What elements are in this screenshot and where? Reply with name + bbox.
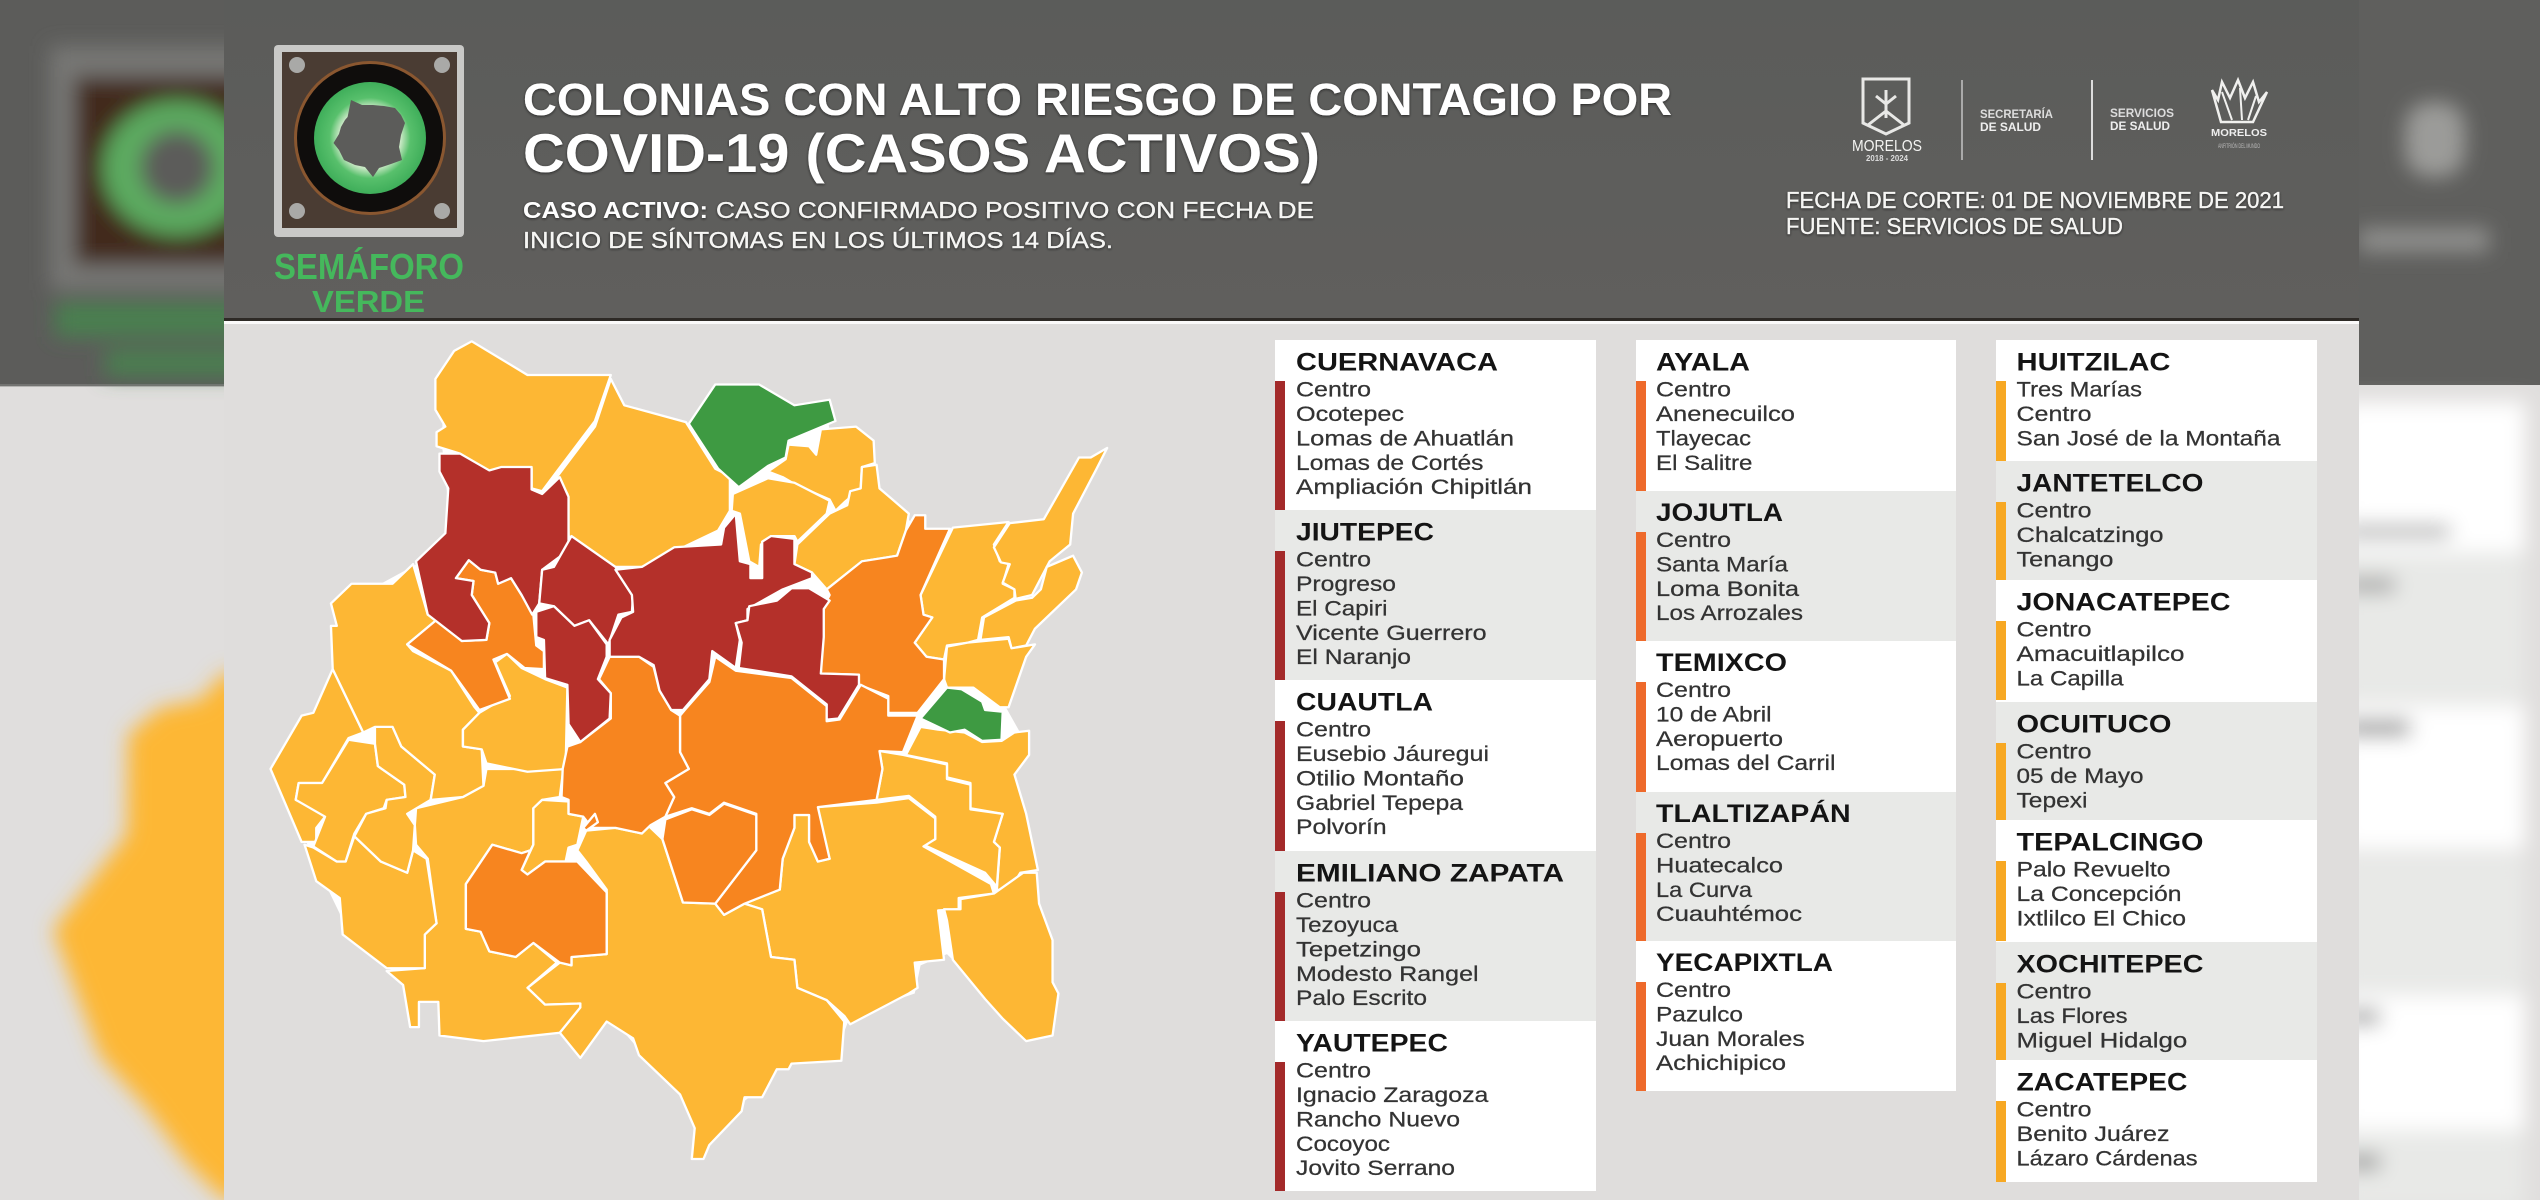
card: Cuautla bbox=[1275, 680, 1596, 852]
card: Zacatepec: Benito Juárez bbox=[2016, 1123, 2170, 1146]
icon: Morelos coat of arms bbox=[1852, 79, 1922, 163]
card: Yautepec: Ignacio Zaragoza bbox=[1296, 1084, 1489, 1107]
Servicios de Salud: SERVICIOS bbox=[2110, 106, 2174, 120]
card: Jojutla: Los Arrozales bbox=[1656, 602, 1803, 625]
card: Tepalcingo: TEPALCINGO bbox=[2016, 828, 2204, 856]
card: Temixco: TEMIXCO bbox=[1656, 649, 1787, 677]
definition text: INICIO DE SÍNTOMAS EN LOS ÚLTIMOS 14 DÍAS. bbox=[523, 227, 1113, 253]
card: Jonacatepec: Amacuitlapilco bbox=[2016, 643, 2184, 666]
card: Temixco: Centro bbox=[1656, 679, 1731, 702]
card: Ayala: Tlayecac bbox=[1656, 427, 1751, 450]
card: Tlaltizapán: La Curva bbox=[1656, 879, 1752, 902]
card: Jantetelco bbox=[1996, 461, 2317, 580]
card: Yecapixtla: Pazulco bbox=[1656, 1003, 1743, 1026]
card: Tlaltizapán: Cuauhtémoc bbox=[1656, 903, 1802, 926]
card: Temixco: Lomas del Carril bbox=[1656, 752, 1836, 775]
card: Cuautla: Centro bbox=[1296, 719, 1371, 742]
cut-off date and source bbox=[1786, 187, 2284, 239]
card: Emiliano Zapata: Tezoyuca bbox=[1296, 914, 1398, 937]
card: Jiutepec: El Naranjo bbox=[1296, 646, 1411, 669]
card: Huitzilac: HUITZILAC bbox=[2016, 348, 2170, 376]
icon: Morelos coat of arms: 2018 - 2024 bbox=[1866, 154, 1909, 163]
card: Jonacatepec bbox=[1996, 580, 2317, 702]
card: Jiutepec: Vicente Guerrero bbox=[1296, 622, 1487, 645]
Secretaría de Salud: SECRETARÍA bbox=[1980, 106, 2053, 121]
card: Huitzilac: Centro bbox=[2016, 403, 2092, 426]
card: Tepalcingo: La Concepción bbox=[2016, 883, 2182, 906]
semáforo verde label bbox=[274, 246, 464, 319]
card: Zacatepec bbox=[1996, 1060, 2317, 1182]
Secretaría de Salud bbox=[1980, 106, 2053, 134]
card: Temixco bbox=[1636, 641, 1956, 792]
Secretaría de Salud: DE SALUD bbox=[1980, 120, 2041, 134]
cut-off date and source: FUENTE: SERVICIOS DE SALUD bbox=[1786, 213, 2123, 239]
card: Jiutepec: Centro bbox=[1296, 549, 1371, 572]
card: Yecapixtla: Achichipico bbox=[1656, 1052, 1786, 1075]
card: Jiutepec: El Capiri bbox=[1296, 597, 1388, 620]
card: Cuernavaca: CUERNAVACA bbox=[1296, 348, 1498, 376]
card: Emiliano Zapata bbox=[1275, 851, 1596, 1021]
blurred background: left side bbox=[0, 0, 260, 1200]
card: Cuautla: CUAUTLA bbox=[1296, 688, 1433, 716]
definition text: CASO ACTIVO: bbox=[523, 197, 708, 223]
header band bbox=[224, 0, 2359, 324]
card: Temixco: 10 de Abril bbox=[1656, 703, 1772, 726]
Servicios de Salud: DE SALUD bbox=[2110, 119, 2170, 133]
card: Jantetelco: Chalcatzingo bbox=[2016, 524, 2164, 547]
icon: Morelos flower bbox=[2211, 80, 2267, 150]
card: Yautepec: Cocoyoc bbox=[1296, 1133, 1390, 1156]
card: Xochitepec bbox=[1996, 942, 2317, 1060]
card: Tepalcingo: Palo Revuelto bbox=[2016, 859, 2170, 882]
card: Tlaltizapán: Huatecalco bbox=[1656, 854, 1783, 877]
map: green municipalities bbox=[689, 385, 1003, 741]
icon: Morelos flower: MORELOS bbox=[2211, 128, 2267, 139]
card: Jojutla: Centro bbox=[1656, 529, 1731, 552]
card: Xochitepec: Miguel Hidalgo bbox=[2016, 1029, 2187, 1052]
icon: semáforo verde light bbox=[274, 45, 464, 237]
title: COLONIAS CON ALTO RIESGO DE CONTAGIO POR bbox=[523, 74, 1672, 125]
title bbox=[523, 74, 1672, 184]
card: Emiliano Zapata: Modesto Rangel bbox=[1296, 963, 1479, 986]
card: Cuernavaca bbox=[1275, 340, 1596, 510]
card: Emiliano Zapata: Centro bbox=[1296, 890, 1371, 913]
card: Yautepec: Jovito Serrano bbox=[1296, 1157, 1455, 1180]
card: Xochitepec: XOCHITEPEC bbox=[2016, 950, 2204, 978]
card: Cuautla: Polvorín bbox=[1296, 816, 1387, 839]
list column: municipalities in orange bbox=[1636, 340, 1956, 1091]
card: Jojutla bbox=[1636, 491, 1956, 641]
card: Jojutla: Santa María bbox=[1656, 553, 1788, 576]
card: Cuautla: Otilio Montaño bbox=[1296, 767, 1464, 790]
list column: municipalities in red bbox=[1275, 340, 1596, 1191]
card: Ayala bbox=[1636, 340, 1956, 491]
card: Ayala: Anenecuilco bbox=[1656, 403, 1795, 426]
card: Cuernavaca: Ocotepec bbox=[1296, 403, 1404, 426]
card: Cuernavaca: Lomas de Ahuatlán bbox=[1296, 427, 1514, 450]
card: Ayala: Centro bbox=[1656, 379, 1731, 402]
card: Tepalcingo: Ixtlilco El Chico bbox=[2016, 907, 2186, 930]
card: Tepalcingo bbox=[1996, 820, 2317, 942]
card: Tlaltizapán: TLALTIZAPÁN bbox=[1656, 799, 1851, 828]
card: Yautepec bbox=[1275, 1021, 1596, 1191]
card: Emiliano Zapata: Tepetzingo bbox=[1296, 938, 1421, 961]
semáforo verde label: VERDE bbox=[312, 284, 425, 319]
card: Jonacatepec: JONACATEPEC bbox=[2016, 588, 2230, 616]
card: Jonacatepec: Centro bbox=[2016, 619, 2092, 642]
list column: municipalities in yellow bbox=[1996, 340, 2317, 1182]
card: Yautepec: Centro bbox=[1296, 1060, 1371, 1083]
card: Temixco: Aeropuerto bbox=[1656, 728, 1783, 751]
card: Zacatepec: Centro bbox=[2016, 1099, 2092, 1122]
card: Ocuituco: 05 de Mayo bbox=[2016, 765, 2144, 788]
card: Jojutla: Loma Bonita bbox=[1656, 578, 1799, 601]
map of Morelos municipalities bbox=[271, 341, 1107, 1159]
card: Xochitepec: Las Flores bbox=[2016, 1005, 2128, 1028]
map: orange municipalities bbox=[407, 515, 950, 965]
card: Huitzilac: Tres Marías bbox=[2016, 379, 2142, 402]
card: Cuautla: Eusebio Jáuregui bbox=[1296, 743, 1489, 766]
card: Zacatepec: Lázaro Cárdenas bbox=[2016, 1147, 2198, 1170]
card: Xochitepec: Centro bbox=[2016, 981, 2092, 1004]
card: Yecapixtla: Centro bbox=[1656, 979, 1731, 1002]
card: Cuernavaca: Centro bbox=[1296, 379, 1371, 402]
card: Jojutla: JOJUTLA bbox=[1656, 499, 1783, 527]
card: Yautepec: Rancho Nuevo bbox=[1296, 1108, 1460, 1131]
title: COVID-19 (CASOS ACTIVOS) bbox=[523, 122, 1320, 184]
card: Ocuituco: OCUITUCO bbox=[2016, 710, 2172, 738]
logos: Morelos, Secretaría de Salud, Servicios de Salud bbox=[1852, 79, 2267, 163]
card: Ayala: AYALA bbox=[1656, 348, 1750, 376]
card: Tlaltizapán bbox=[1636, 792, 1956, 941]
card: Jonacatepec: La Capilla bbox=[2016, 667, 2124, 690]
icon: Morelos flower: ANFITRIÓN DEL MUNDO bbox=[2218, 143, 2260, 150]
card: Jantetelco: Centro bbox=[2016, 500, 2092, 523]
card: Ayala: El Salitre bbox=[1656, 452, 1752, 475]
cut-off date and source: FECHA DE CORTE: 01 DE NOVIEMBRE DE 2021 bbox=[1786, 187, 2284, 213]
card: Ocuituco: Centro bbox=[2016, 741, 2092, 764]
card: Huitzilac: San José de la Montaña bbox=[2016, 427, 2281, 450]
card: Jantetelco: Tenango bbox=[2016, 548, 2114, 571]
blurred background: right side bbox=[2340, 0, 2540, 1200]
central panel background bbox=[224, 320, 2359, 1200]
card: Yautepec: YAUTEPEC bbox=[1296, 1030, 1448, 1058]
card: Tlaltizapán: Centro bbox=[1656, 830, 1731, 853]
card: Emiliano Zapata: EMILIANO ZAPATA bbox=[1296, 860, 1564, 888]
definition text: CASO CONFIRMADO POSITIVO CON FECHA DE bbox=[716, 197, 1314, 223]
card: Jiutepec: JIUTEPEC bbox=[1296, 518, 1434, 546]
map: red municipalities bbox=[416, 454, 859, 742]
icon: Morelos coat of arms: MORELOS bbox=[1852, 138, 1922, 155]
card: Ocuituco bbox=[1996, 702, 2317, 820]
card: Jiutepec bbox=[1275, 510, 1596, 680]
card: Ocuituco: Tepexi bbox=[2016, 789, 2088, 812]
card: Jiutepec: Progreso bbox=[1296, 573, 1396, 596]
card: Zacatepec: ZACATEPEC bbox=[2016, 1068, 2188, 1096]
semáforo verde label: SEMÁFORO bbox=[274, 246, 464, 287]
definition text bbox=[523, 197, 1314, 253]
card: Cuernavaca: Lomas de Cortés bbox=[1296, 452, 1484, 475]
Servicios de Salud bbox=[2110, 106, 2174, 133]
card: Emiliano Zapata: Palo Escrito bbox=[1296, 987, 1427, 1010]
card: Cuautla: Gabriel Tepepa bbox=[1296, 792, 1463, 815]
card: Yecapixtla: Juan Morales bbox=[1656, 1028, 1805, 1051]
card: Yecapixtla bbox=[1636, 941, 1956, 1091]
card: Jantetelco: JANTETELCO bbox=[2016, 470, 2204, 498]
map: yellow municipalities bbox=[271, 341, 1107, 1159]
card: Huitzilac bbox=[1996, 340, 2317, 461]
card: Yecapixtla: YECAPIXTLA bbox=[1656, 949, 1833, 977]
map: state underlay closing seams between municipalities bbox=[281, 354, 1050, 1151]
card: Cuernavaca: Ampliación Chipitlán bbox=[1296, 476, 1532, 499]
